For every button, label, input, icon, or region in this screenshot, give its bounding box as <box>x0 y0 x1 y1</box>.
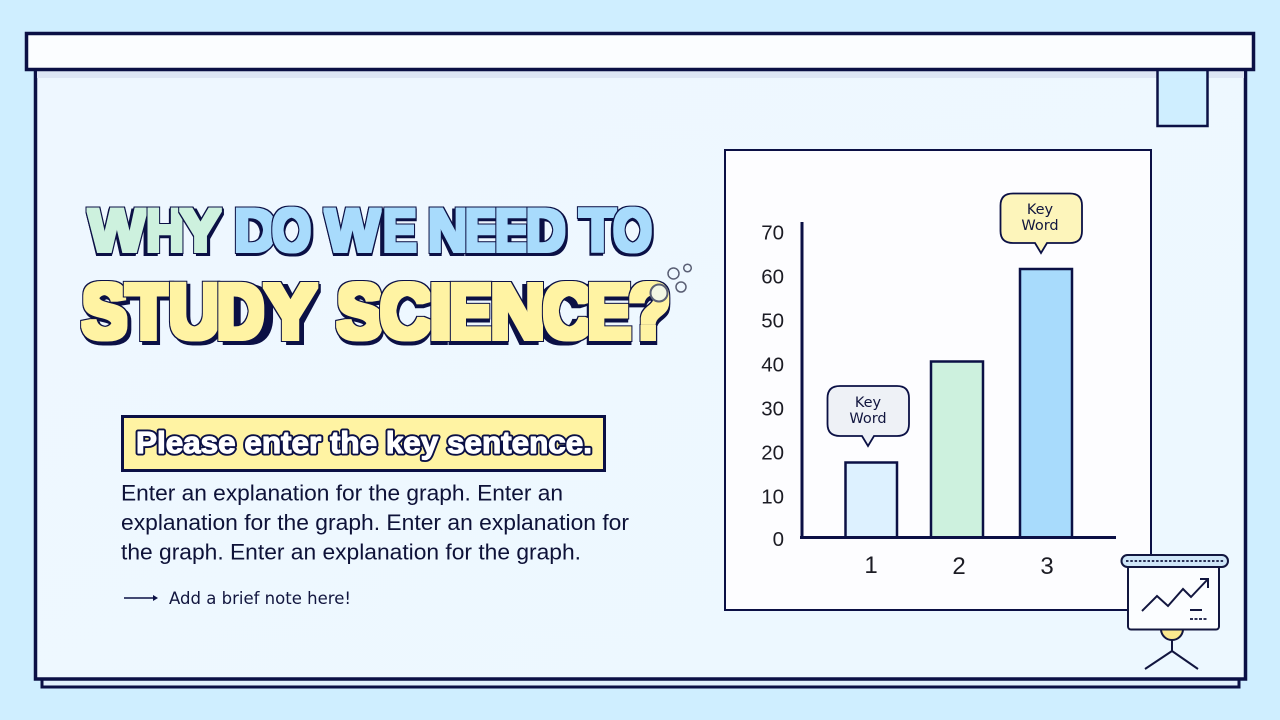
explanation text <box>121 480 630 564</box>
callout: bar 1: Word <box>849 411 887 427</box>
y axis labels: 40 <box>761 354 784 376</box>
bubbles icon <box>650 264 691 302</box>
y axis labels <box>761 222 784 551</box>
explanation text: the graph. Enter an explanation for the graph. <box>121 540 581 564</box>
title line 2: E <box>588 269 631 355</box>
title line 2: ? <box>629 269 670 355</box>
y axis labels: 30 <box>761 398 784 420</box>
title line 1: O <box>272 196 311 264</box>
title line 1: Y <box>180 196 221 264</box>
title line 1: W <box>88 196 146 264</box>
chart panel <box>725 150 1151 610</box>
y axis labels: 50 <box>761 310 784 332</box>
arrow <box>124 595 158 601</box>
x axis labels: 1 <box>864 552 878 579</box>
key sentence: Please enter the key sentence. <box>136 425 592 460</box>
explanation text: Enter an explanation for the graph. Enter an <box>121 480 563 506</box>
title line 1: N <box>428 196 469 264</box>
title line 1: WHY <box>89 198 222 266</box>
bar 2 <box>931 362 983 538</box>
title line 1: T <box>579 196 616 264</box>
top bar <box>26 34 1254 70</box>
title line 1: W <box>325 196 381 264</box>
top bar shadow <box>37 70 1244 78</box>
title line 2: STUDY <box>84 272 318 358</box>
callout: bar 3: Word <box>1021 218 1059 234</box>
title line 2: S <box>337 269 382 355</box>
title line 2: N <box>490 269 545 355</box>
callout: bar 1 <box>828 386 909 446</box>
title line 1: E <box>495 196 528 264</box>
y axis labels: 70 <box>761 222 784 244</box>
title line 1: O <box>613 196 652 264</box>
explanation text: explanation for the graph. Enter an explanation for <box>121 510 630 535</box>
bookmark tab <box>1158 70 1208 126</box>
title line 2 <box>82 269 670 358</box>
title line 1: NEED <box>429 198 567 266</box>
title line 2: C <box>380 269 431 355</box>
bar 1 <box>846 462 897 538</box>
title line 2: C <box>543 269 592 355</box>
title line 1: DO <box>236 198 312 266</box>
title line 2: S <box>82 269 127 355</box>
title line 2: Y <box>264 269 317 355</box>
title line 1 <box>88 196 653 266</box>
board back sheet <box>42 660 1239 687</box>
rising line chart <box>1142 579 1208 611</box>
key sentence box <box>122 416 604 470</box>
y axis labels: 20 <box>761 442 784 464</box>
presenter <box>1145 629 1198 669</box>
title line 1: E <box>383 196 416 264</box>
title line 1: TO <box>580 198 653 266</box>
title line 1: D <box>526 196 566 264</box>
key sentence: Please enter the key sentence. <box>136 425 592 460</box>
title line 2: SCIENCE? <box>339 272 670 358</box>
y axis labels: 10 <box>761 486 784 508</box>
y axis labels: 60 <box>761 266 784 288</box>
x axis labels <box>864 552 1054 580</box>
screen <box>1128 565 1219 630</box>
bar chart <box>761 222 1116 580</box>
title line 1: H <box>146 196 184 264</box>
bar 3 <box>1020 269 1072 538</box>
title line 2: U <box>169 269 221 355</box>
y axis labels: 0 <box>773 528 784 551</box>
title line 1: D <box>234 196 276 264</box>
icon: presentation board <box>1122 555 1228 669</box>
title line 2: D <box>217 269 264 355</box>
screen roller <box>1122 555 1228 567</box>
title <box>82 196 670 358</box>
brief note: Add a brief note here! <box>169 589 351 609</box>
title line 1: WE <box>326 198 417 266</box>
title line 2: I <box>428 269 456 355</box>
x axis labels: 2 <box>952 553 966 580</box>
callout: bar 1: Key <box>855 395 882 411</box>
callout: bar 3 <box>1000 194 1082 253</box>
axes <box>800 222 1116 538</box>
title line 2: E <box>450 269 492 355</box>
title line 2: T <box>126 269 171 355</box>
title line 1: E <box>465 196 498 264</box>
x axis labels: 3 <box>1040 553 1054 580</box>
callout: bar 3: Key <box>1027 202 1054 218</box>
